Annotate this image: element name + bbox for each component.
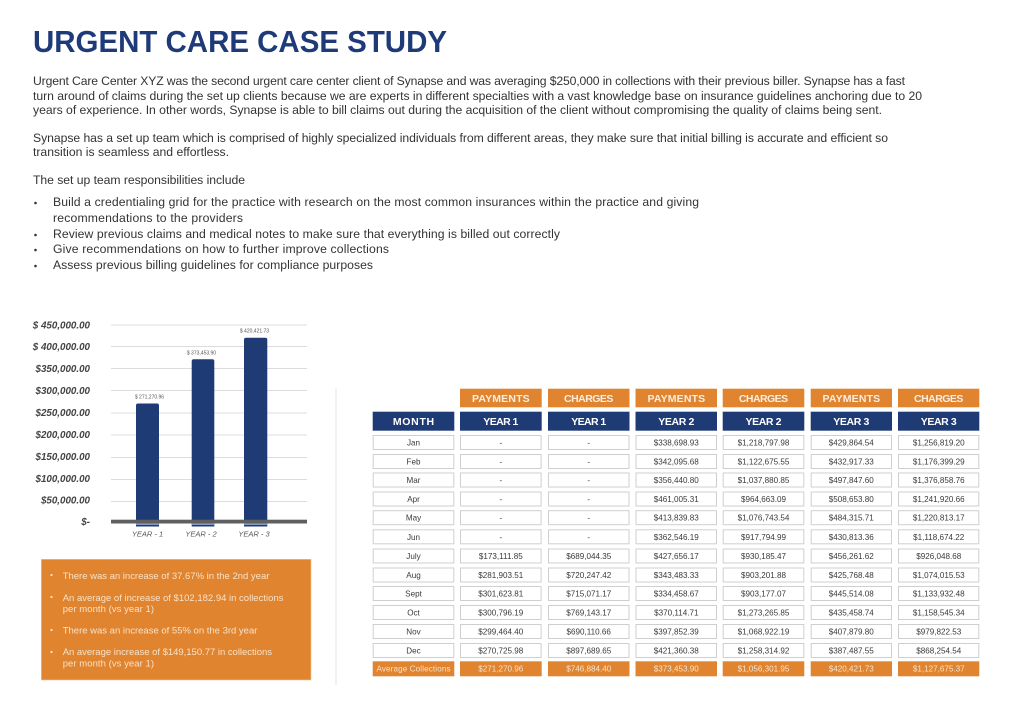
callout: key results: per month (vs year 1) [63, 658, 154, 670]
row: Nov: $979,822.53 [916, 628, 962, 636]
text block: responsibilities intro: The set up team responsibilities include [33, 173, 245, 187]
callout: key results [41, 559, 311, 680]
row: Sept: $715,071.17 [566, 590, 612, 598]
bar value labels: $ 271,270.96 [135, 394, 164, 400]
text block: set up team [33, 131, 888, 159]
bar value labels [135, 328, 269, 400]
header row: month and year: YEAR 1 [483, 416, 518, 428]
row: Feb: $342,095.68 [654, 458, 699, 466]
row: Dec: $421,360.38 [654, 646, 699, 656]
row: July: $427,656.17 [654, 552, 699, 561]
row: Nov [373, 624, 979, 638]
row: Jan: $338,698.93 [654, 438, 699, 448]
header row: month and year [373, 412, 979, 431]
row: Aug: $343,483.33 [654, 571, 699, 580]
y axis labels: $ 400,000.00 [32, 342, 91, 353]
bar value labels: $ 373,453.90 [187, 350, 216, 356]
bullet list: responsibilities [34, 195, 699, 272]
row: Oct: $370,114.71 [654, 608, 699, 618]
row: Jan: $1,218,797.98 [738, 438, 790, 448]
header row: month and year: YEAR 2 [746, 416, 782, 428]
row: May [373, 511, 979, 525]
row: Dec: $1,258,314.92 [738, 646, 790, 656]
row: July [373, 549, 979, 563]
bar chart: average collections by year [32, 320, 307, 538]
row: Mar: - [587, 476, 590, 485]
row: Mar: $1,376,858.76 [913, 476, 965, 485]
row: Jan: Jan [407, 438, 420, 448]
row: Feb: $1,122,675.55 [738, 458, 790, 466]
y axis labels: $150,000.00 [35, 452, 91, 463]
text block: introduction [33, 74, 922, 117]
x axis labels: YEAR - 2 [185, 530, 217, 538]
row: Sept: $334,458.67 [654, 590, 699, 598]
row: Sept [373, 586, 979, 600]
row: Aug: $903,201.88 [741, 571, 787, 580]
row: average collections: $373,453.90 [654, 665, 699, 674]
row: Sept: $445,514.08 [829, 590, 874, 598]
row: Mar: $497,847.60 [829, 476, 874, 485]
text block: set up team: transition is seamless and effortless. [33, 145, 229, 159]
row: Sept: $1,133,932.48 [913, 590, 965, 598]
row: Dec: $387,487.55 [829, 646, 874, 656]
row: Jun: - [587, 533, 590, 542]
row: Feb: $432,917.33 [829, 458, 874, 466]
row: Feb: Feb [407, 458, 421, 466]
callout: key results: There was an increase of 37.67% in the 2nd year [63, 571, 269, 582]
row: Jan: - [499, 438, 502, 448]
y axis labels: $- [80, 517, 90, 528]
y axis labels: $250,000.00 [35, 408, 91, 419]
x axis labels [132, 530, 270, 538]
row: Feb: - [499, 458, 502, 466]
row: Aug: $281,903.51 [478, 571, 524, 580]
row: Jan: $429,864.54 [829, 438, 874, 448]
header row: payments and charges: CHARGES [564, 393, 613, 405]
row: Apr: $461,005.31 [654, 495, 699, 504]
row: Oct: $435,458.74 [829, 608, 874, 618]
callout: key results: per month (vs year 1) [63, 604, 154, 615]
row: average collections: $420,421.73 [829, 665, 874, 674]
row: Nov: $407,879.80 [829, 628, 874, 636]
row: average collections: $1,056,301.95 [738, 665, 790, 674]
bullet list: responsibilities: Assess previous billing guidelines for compliance purposes [53, 258, 373, 272]
bullet list: responsibilities: Build a credentialing grid for the practice with research on the most common insurances within the practice and giving [53, 195, 699, 209]
row: Feb: $1,176,399.29 [913, 458, 965, 466]
row: average collections [373, 661, 979, 676]
row: July: $689,044.35 [566, 552, 612, 561]
row: Apr: $508,653.80 [829, 495, 874, 504]
row: Apr: $1,241,920.66 [913, 495, 965, 504]
row: Nov: $690,110.66 [566, 628, 611, 636]
header row: payments and charges: CHARGES [739, 393, 788, 405]
row: Nov: $397,852.39 [654, 628, 699, 636]
row: average collections: Average Collections [376, 665, 450, 674]
row: Feb: - [587, 458, 590, 466]
row: Mar: $356,440.80 [654, 476, 699, 485]
y axis labels: $ 450,000.00 [32, 320, 91, 332]
y axis labels [32, 320, 91, 528]
row: Apr: Apr [407, 495, 420, 504]
y axis labels: $300,000.00 [35, 386, 91, 397]
row: Mar: Mar [407, 476, 421, 485]
row: Aug [373, 568, 979, 582]
row: Dec: $270,725.98 [478, 646, 524, 656]
row: Aug: Aug [406, 571, 421, 580]
header row: month and year: YEAR 1 [571, 416, 606, 428]
row: Oct: $1,273,265.85 [738, 608, 790, 618]
header row: month and year: YEAR 3 [833, 416, 869, 428]
bullet list: responsibilities: Give recommendations on how to further improve collections [53, 242, 389, 256]
row: May: $1,220,813.17 [913, 514, 965, 523]
row: July: July [406, 552, 422, 561]
header row: payments and charges: PAYMENTS [472, 393, 530, 405]
row: Jun: - [499, 533, 502, 542]
row: May: May [406, 514, 422, 523]
row: July: $173,111.85 [479, 552, 523, 561]
row: Jun: $917,794.99 [741, 533, 787, 542]
row: Oct: $300,796.19 [478, 608, 524, 618]
row: Apr: - [587, 495, 590, 504]
callout: key results: There was an increase of 55% on the 3rd year [63, 626, 257, 636]
text block: introduction: turn around of claims during the set up clients because we are experts in different specialties with a vast knowledge base on insurance guidelines anchoring due to 20 [33, 89, 922, 103]
row: Aug: $1,074,015.53 [913, 571, 965, 580]
row: May: - [587, 514, 590, 523]
row: Jun: Jun [407, 533, 420, 542]
row: Mar: - [499, 476, 502, 485]
row: average collections: $1,127,675.37 [913, 665, 965, 674]
row: Aug: $720,247.42 [566, 571, 612, 580]
row: Sept: Sept [405, 590, 423, 598]
row: Sept: $301,623.81 [478, 590, 524, 598]
row: Jan [373, 436, 979, 450]
callout: key results: An average increase of $149,150.77 in collections [63, 647, 272, 658]
title: URGENT CARE CASE STUDY [33, 24, 447, 59]
row: Jun: $430,813.36 [829, 533, 874, 542]
row: Apr [373, 492, 979, 506]
row: July: $926,048.68 [916, 552, 962, 561]
header row: payments and charges: PAYMENTS [647, 393, 705, 405]
header row: month and year: YEAR 2 [658, 416, 694, 428]
row: Dec: $868,254.54 [916, 646, 962, 656]
row: July: $930,185.47 [741, 552, 787, 561]
row: Jun: $362,546.19 [654, 533, 699, 542]
bullet list: responsibilities: recommendations to the providers [53, 211, 243, 225]
row: May: - [499, 514, 502, 523]
x axis labels: YEAR - 1 [132, 530, 163, 538]
y axis labels: $50,000.00 [40, 496, 91, 506]
row: July: $456,261.62 [829, 552, 874, 561]
y axis labels: $200,000.00 [35, 430, 91, 441]
row: Jan: $1,256,819.20 [913, 438, 965, 448]
row: Jun [373, 530, 979, 544]
row: May: $1,076,743.54 [738, 514, 790, 523]
row: Oct: $769,143.17 [566, 608, 612, 618]
header row: month and year: YEAR 3 [921, 416, 957, 428]
header row: month and year: MONTH [393, 416, 434, 428]
row: Nov: $299,464.40 [478, 628, 524, 636]
row: Mar [373, 473, 979, 487]
row: average collections: $271,270.96 [478, 665, 524, 674]
y axis labels: $350,000.00 [35, 364, 91, 375]
bar value labels: $ 420,421.73 [240, 328, 269, 334]
row: Dec: Dec [406, 646, 421, 656]
row: Apr: $964,663.09 [741, 495, 787, 504]
row: Oct: Oct [407, 608, 421, 618]
bars [136, 338, 267, 526]
row: Jun: $1,118,674.22 [913, 533, 965, 542]
text block: introduction: years of experience. In other words, Synapse is able to bill claims out during the acquisition of the client without compromising the quality of claims being sent. [33, 103, 882, 117]
row: Nov: Nov [406, 628, 422, 636]
y axis labels: $100,000.00 [35, 474, 91, 485]
bullet list: responsibilities: Review previous claims and medical notes to make sure that everything is billed out correctly [53, 227, 561, 241]
callout: key results: An average of increase of $102,182.94 in collections [63, 593, 284, 604]
row: May: $484,315.71 [829, 514, 874, 523]
header row: payments and charges [460, 389, 979, 407]
row: Jan: - [587, 438, 590, 448]
row: Sept: $903,177.07 [741, 590, 787, 598]
row: average collections: $746,884.40 [566, 665, 612, 674]
row: Nov: $1,068,922.19 [738, 628, 790, 636]
header row: payments and charges: CHARGES [914, 393, 963, 405]
table: payments and charges by month [373, 389, 979, 676]
row: Oct: $1,158,545.34 [913, 608, 965, 618]
text block: introduction: Urgent Care Center XYZ was the second urgent care center client of Synapse and was averaging $250,000 in collections with their previous biller. Synapse has a fast [33, 74, 906, 88]
text block: set up team: Synapse has a set up team which is comprised of highly specialized individuals from different areas, they make sure that initial billing is accurate and efficient so [33, 131, 888, 145]
row: May: $413,839.83 [654, 514, 699, 523]
x axis labels: YEAR - 3 [238, 530, 270, 538]
header row: payments and charges: PAYMENTS [822, 393, 880, 405]
row: Mar: $1,037,880.85 [738, 476, 790, 485]
row: Dec: $897,689.65 [566, 646, 612, 656]
row: Dec [373, 644, 979, 658]
row: Apr: - [499, 495, 502, 504]
row: Feb [373, 454, 979, 468]
row: Aug: $425,768.48 [829, 571, 874, 580]
row: Oct [373, 606, 979, 620]
